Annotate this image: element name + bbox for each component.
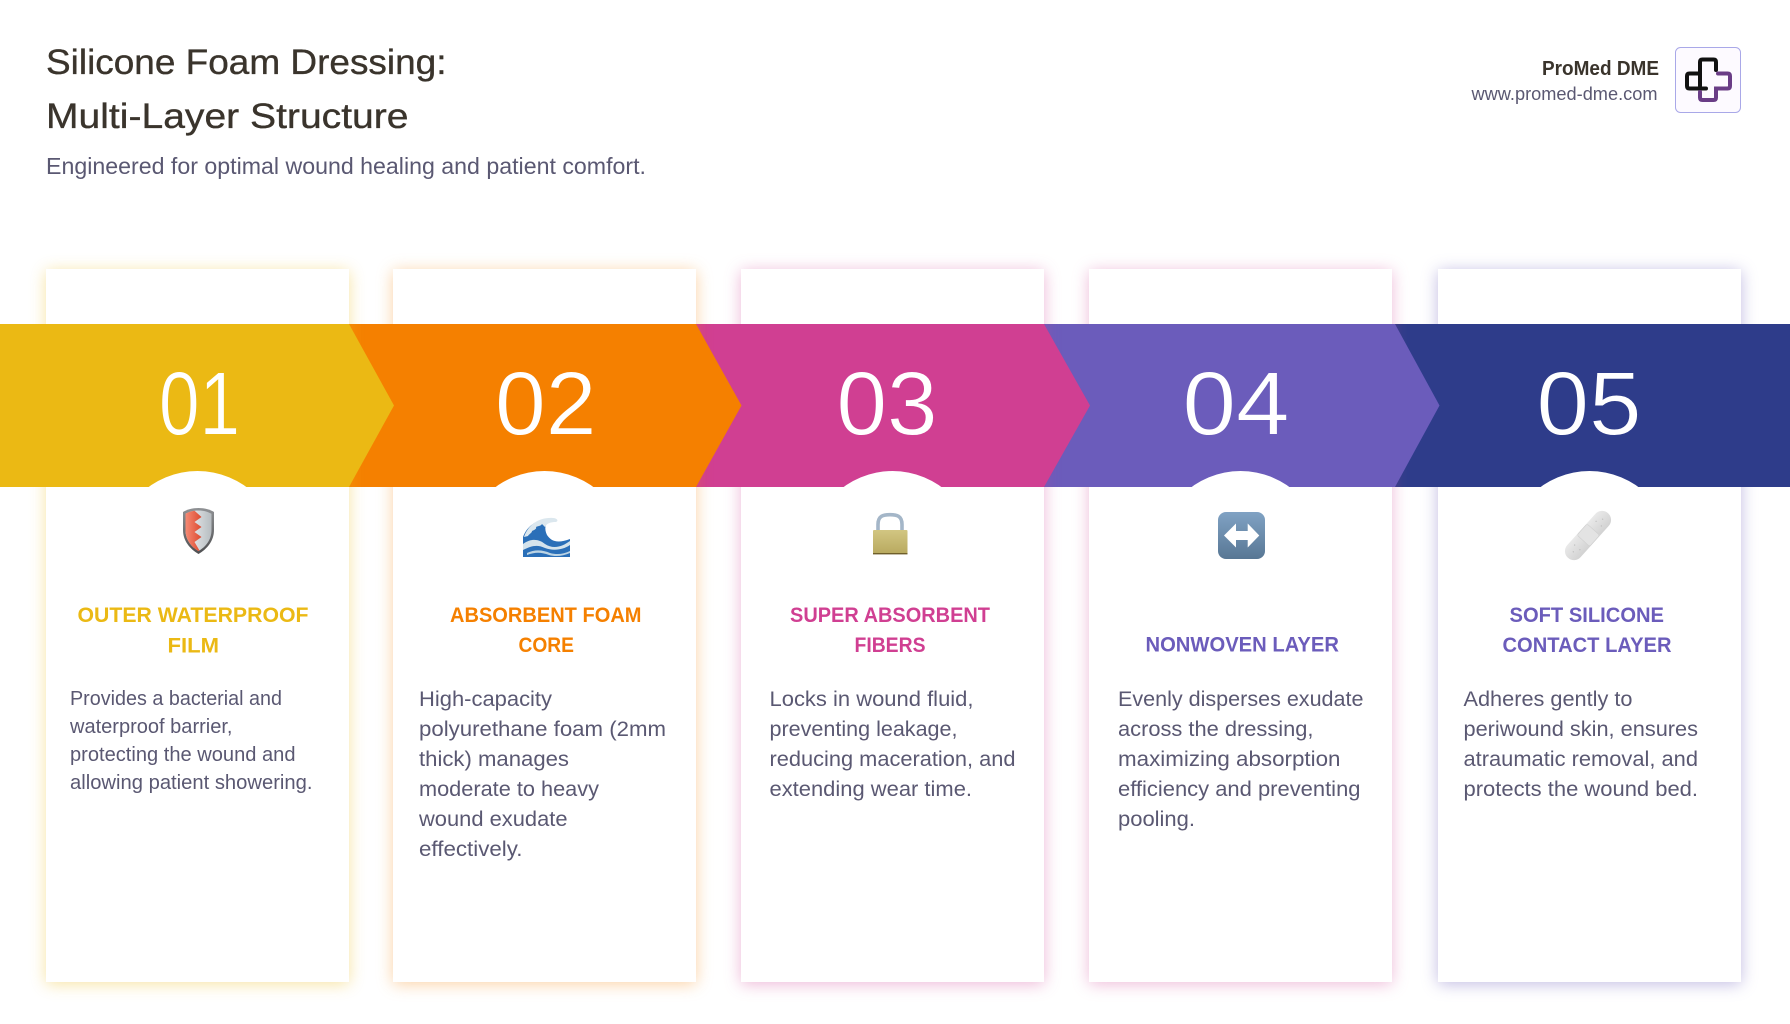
panel: 01 outer waterproof film xyxy=(0,269,394,982)
heading: ABSORBENT FOAM xyxy=(450,604,642,627)
body text: effectively. xyxy=(419,837,522,861)
title xyxy=(46,43,446,136)
body text: wound exudate xyxy=(418,807,568,831)
body text xyxy=(418,687,666,861)
body text: waterproof barrier, xyxy=(69,716,232,738)
body text: Evenly disperses exudate xyxy=(1118,687,1364,711)
banner arrow 04 xyxy=(1044,324,1440,487)
panel: 02 absorbent foam core xyxy=(349,269,742,982)
heading: SOFT SILICONE xyxy=(1510,604,1664,627)
heading: CONTACT LAYER xyxy=(1502,634,1672,657)
heading: OUTER WATERPROOF xyxy=(78,604,309,627)
card background xyxy=(1089,269,1392,982)
number 03: 03 xyxy=(836,354,938,454)
heading xyxy=(450,604,642,657)
icon notch xyxy=(114,471,280,637)
title: Multi-Layer Structure xyxy=(46,97,408,136)
icon notch xyxy=(1506,471,1672,637)
heading: SUPER ABSORBENT xyxy=(790,604,990,627)
heading xyxy=(78,604,309,658)
icon: bandage xyxy=(1561,507,1615,564)
icon: brand logo xyxy=(1676,48,1740,112)
title: Silicone Foam Dressing: xyxy=(46,43,446,82)
banner arrow 05 xyxy=(1395,324,1790,487)
brand name: ProMed DME xyxy=(1542,58,1659,80)
icon: wave xyxy=(523,518,570,557)
banner arrow 01 xyxy=(0,324,394,487)
number 05: 05 xyxy=(1536,354,1642,454)
number 04: 04 xyxy=(1182,354,1290,454)
body text: thick) manages xyxy=(419,747,569,771)
body text: atraumatic removal, and xyxy=(1464,747,1698,771)
card background xyxy=(46,269,349,982)
body text: extending wear time. xyxy=(770,777,972,801)
body text: reducing maceration, and xyxy=(770,747,1016,771)
card background xyxy=(1438,269,1741,982)
panel: 04 nonwoven layer xyxy=(1044,269,1440,982)
body text: allowing patient showering. xyxy=(70,772,312,794)
body text xyxy=(69,688,312,794)
icon: left-right arrow xyxy=(1218,512,1265,559)
icon: padlock xyxy=(873,515,908,554)
body text xyxy=(770,687,1016,801)
brand url: www.promed-dme.com xyxy=(1470,84,1658,104)
icon notch xyxy=(462,471,628,637)
body text: preventing leakage, xyxy=(770,717,958,741)
banner arrow 02 xyxy=(349,324,742,487)
panel: 05 soft silicone contact layer xyxy=(1395,269,1790,982)
number 02: 02 xyxy=(495,354,596,454)
body text: High-capacity xyxy=(419,687,552,711)
body text: protecting the wound and xyxy=(70,744,296,766)
number 01: 01 xyxy=(159,354,240,454)
body text: Locks in wound fluid, xyxy=(770,687,974,711)
heading xyxy=(1502,604,1672,657)
heading: FILM xyxy=(168,634,219,658)
card background xyxy=(393,269,696,982)
icon: shield xyxy=(183,508,214,554)
body text xyxy=(1118,687,1364,831)
body text: pooling. xyxy=(1118,807,1195,831)
body text: protects the wound bed. xyxy=(1464,777,1698,801)
icon notch xyxy=(1158,471,1324,637)
body text: periwound skin, ensures xyxy=(1464,717,1698,741)
heading: NONWOVEN LAYER xyxy=(1146,634,1339,656)
banner arrow 03 xyxy=(696,324,1090,487)
body text: Adheres gently to xyxy=(1464,687,1633,711)
body text xyxy=(1464,687,1698,801)
body text: maximizing absorption xyxy=(1118,747,1340,771)
heading: FIBERS xyxy=(854,634,926,657)
body text: across the dressing, xyxy=(1118,717,1314,741)
body text: efficiency and preventing xyxy=(1118,777,1360,801)
heading: CORE xyxy=(518,634,574,657)
panel: 03 super absorbent fibers xyxy=(696,269,1090,982)
body text: polyurethane foam (2mm xyxy=(419,717,666,741)
heading xyxy=(790,604,990,657)
icon notch xyxy=(810,471,976,637)
body text: Provides a bacterial and xyxy=(70,688,282,710)
card background xyxy=(741,269,1044,982)
subtitle: Engineered for optimal wound healing and patient comfort. xyxy=(46,153,646,179)
brand block xyxy=(1470,48,1740,112)
body text: moderate to heavy xyxy=(419,777,599,801)
